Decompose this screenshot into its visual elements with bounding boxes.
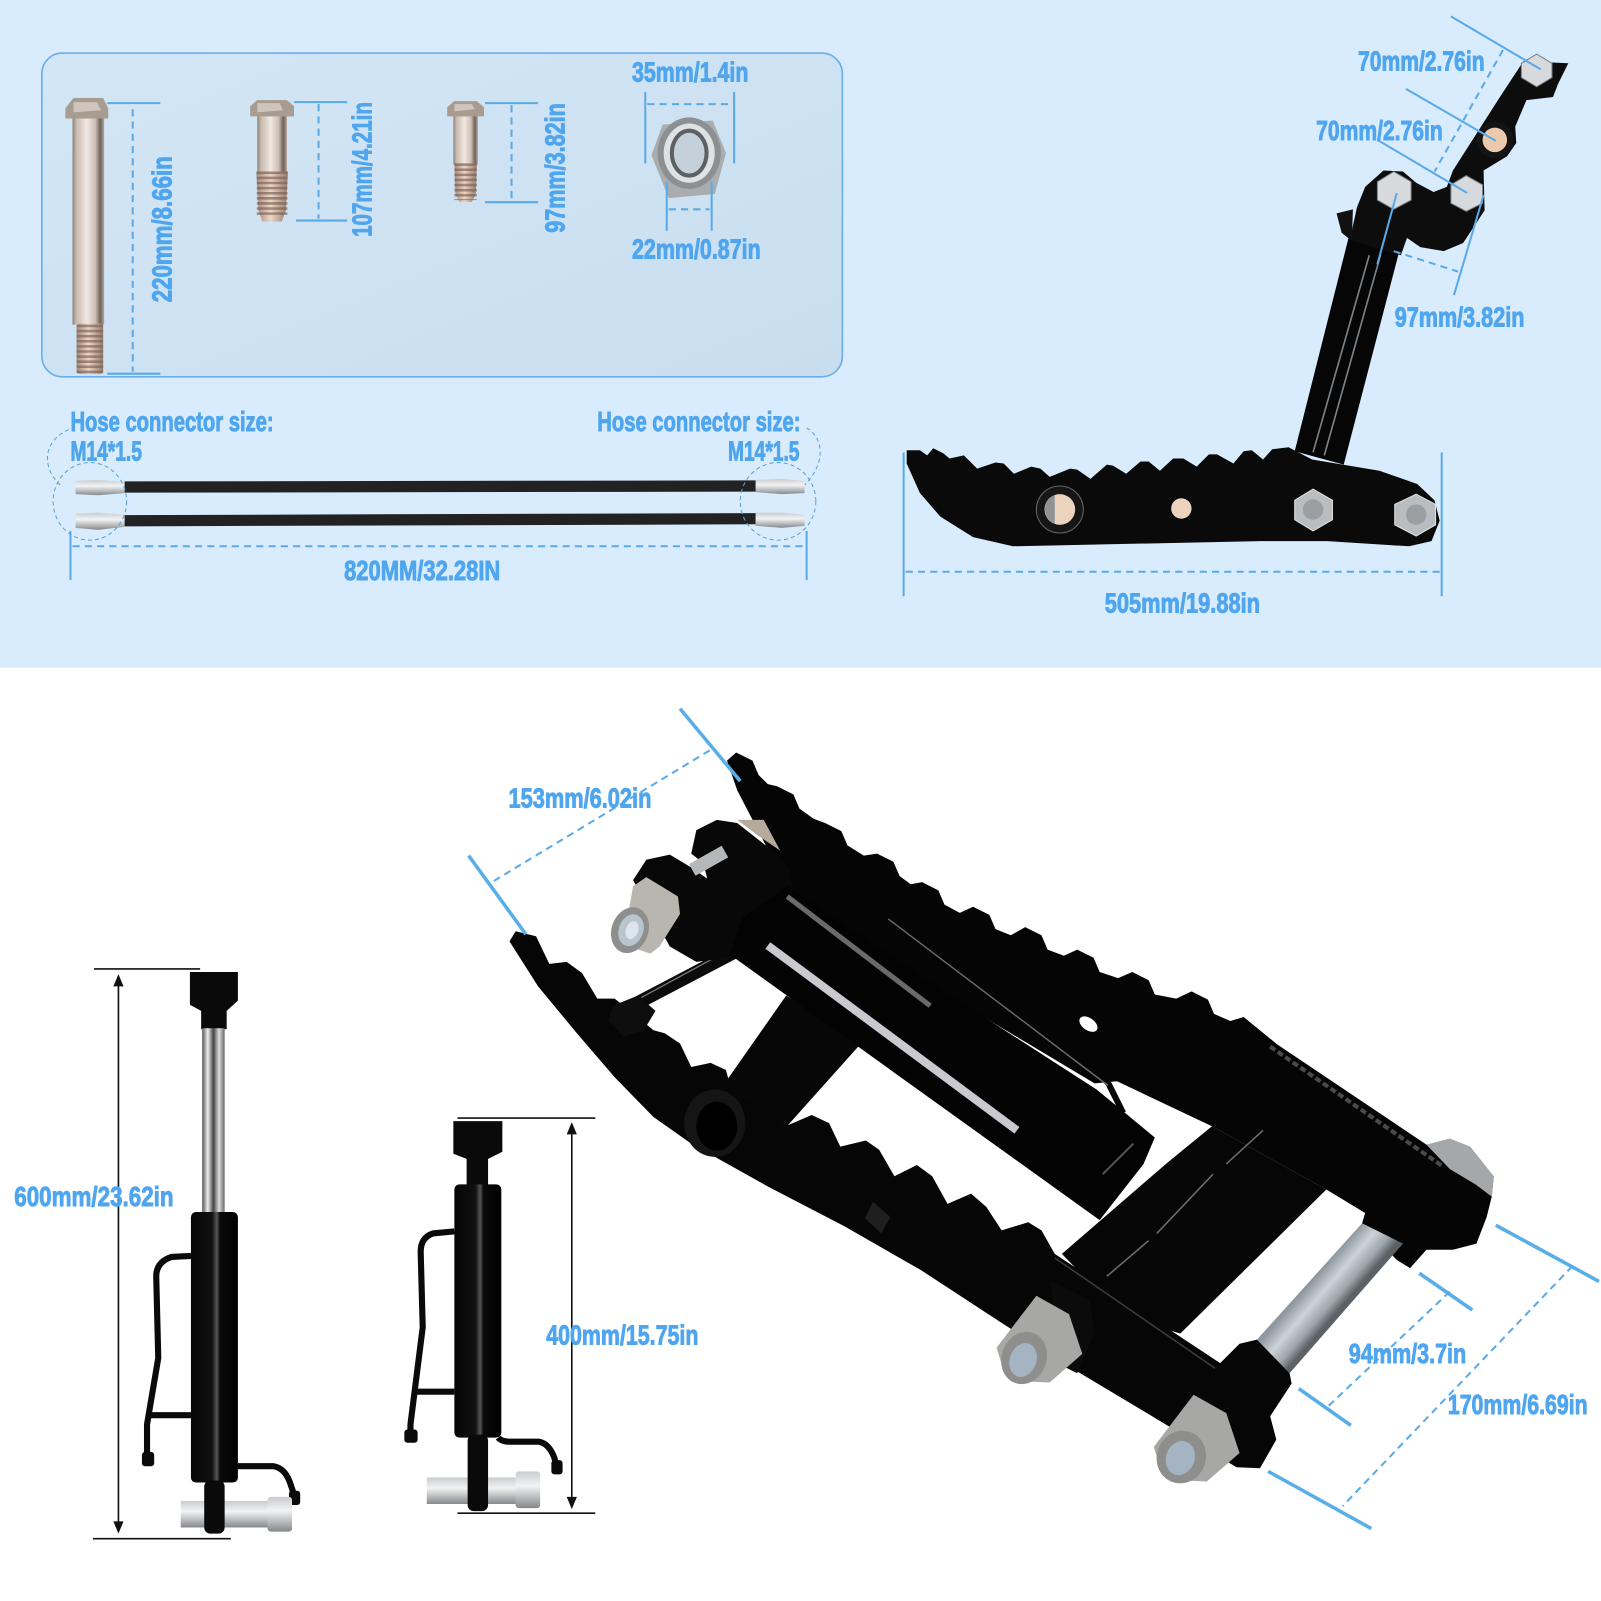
dimension: 70mm upper xyxy=(1358,16,1541,172)
back plate and rear rail xyxy=(727,753,1494,1268)
arm tube xyxy=(1295,233,1401,465)
plate hole, slot and nuts xyxy=(1036,486,1436,536)
lower lug xyxy=(468,1435,488,1511)
dimension: 107mm bolt: 107mm/4.21in xyxy=(347,102,378,237)
pin and nut xyxy=(427,1471,540,1508)
dimension: nut bore 22mm: 22mm/0.87in xyxy=(632,233,761,264)
upper bracket xyxy=(1350,61,1568,255)
pipes xyxy=(410,1231,557,1470)
main pin xyxy=(1257,1223,1403,1373)
dimension: 70mm lower: 70mm/2.76in xyxy=(1316,115,1443,146)
hub on front plate xyxy=(684,1089,745,1157)
dimension: 505mm: 505mm/19.88in xyxy=(1105,588,1260,619)
pipe end fittings xyxy=(142,1452,300,1505)
panel: main thumb assembly xyxy=(469,709,1599,1529)
hole in bracket xyxy=(1476,122,1513,158)
background: blue top section xyxy=(0,0,1601,668)
nut upper pin xyxy=(605,877,680,959)
crossbar: rear frame xyxy=(1062,1126,1326,1333)
pin and nut xyxy=(181,1497,292,1532)
rod neck xyxy=(467,1158,488,1186)
dimension: 97mm: 97mm/3.82in xyxy=(1395,302,1524,333)
dimension: nut width 35mm xyxy=(632,57,748,163)
dimension: 97mm bolt xyxy=(485,103,571,233)
label: left hose connector size: Hose connector size: xyxy=(70,406,274,437)
front ear block xyxy=(1051,1280,1095,1373)
dimension: nut bore 22mm xyxy=(632,182,761,264)
dimension: 97mm xyxy=(1377,193,1524,333)
pipes xyxy=(147,1256,296,1501)
chrome rod xyxy=(202,1028,225,1212)
label: left hose connector size: M14*1.5 xyxy=(70,435,142,466)
dimension: 153mm: 153mm/6.02in xyxy=(508,783,651,814)
dimension: 600mm: 600mm/23.62in xyxy=(14,1181,174,1212)
nut rear top xyxy=(1426,1138,1494,1197)
pipe end fittings xyxy=(404,1429,563,1474)
ear bridge xyxy=(705,868,796,950)
icon: lock nut xyxy=(651,117,726,198)
label: left hose connector size xyxy=(70,406,274,466)
dimension: 220mm bolt: 220mm/8.66in xyxy=(147,156,178,302)
slot on front plate xyxy=(865,1202,890,1233)
icon: short bolt 97mm xyxy=(447,101,484,202)
cylinder tube xyxy=(730,886,1155,1220)
dimension: 94mm xyxy=(1299,1273,1472,1425)
panel: hoses xyxy=(47,406,820,586)
panel: thumb side view xyxy=(904,16,1568,619)
dimension: 97mm bolt: 97mm/3.82in xyxy=(540,103,571,233)
dimension: 505mm xyxy=(904,452,1442,619)
dimension: 70mm lower xyxy=(1316,89,1496,193)
rod neck xyxy=(201,1009,227,1029)
dimension: nut width 35mm: 35mm/1.4in xyxy=(632,57,748,88)
icon: medium bolt 107mm xyxy=(250,100,294,222)
dimension: hose length 820mm xyxy=(70,531,807,586)
lower lug xyxy=(204,1481,225,1534)
rail sheen xyxy=(1055,1258,1215,1368)
dimension: hose length 820mm: 820MM/32.28IN xyxy=(344,555,500,586)
washer behind upper ear xyxy=(737,820,780,851)
head clevis xyxy=(453,1121,502,1159)
label: right hose connector size xyxy=(597,406,800,466)
hose pair xyxy=(76,479,805,530)
body tube xyxy=(454,1184,501,1438)
slot in back plate xyxy=(1077,1013,1100,1035)
dimension: 220mm bolt xyxy=(107,103,178,374)
lower ear xyxy=(633,855,743,962)
dimension: 400mm xyxy=(457,1118,698,1513)
bolts on bracket xyxy=(1377,54,1552,211)
crossbar: wide xyxy=(715,996,863,1128)
rear rail texture xyxy=(1270,1047,1444,1167)
dimension: 400mm: 400mm/15.75in xyxy=(546,1320,698,1351)
icon: long bolt 220mm xyxy=(65,98,108,374)
dimension: 170mm xyxy=(1268,1225,1599,1529)
dimension: 153mm xyxy=(469,709,740,934)
body tube xyxy=(191,1212,238,1483)
fitting on bracket xyxy=(1337,209,1353,241)
dimension: 107mm bolt xyxy=(294,102,378,237)
panel: bolts and nut xyxy=(42,53,842,377)
panel: cylinder extended xyxy=(14,969,300,1539)
label: right hose connector size: Hose connector size: xyxy=(597,406,800,437)
dimension: 94mm: 94mm/3.7in xyxy=(1349,1338,1466,1369)
nut front left xyxy=(994,1296,1082,1391)
hydraulic pipe xyxy=(847,909,1123,1113)
head clevis xyxy=(190,972,238,1011)
label: right hose connector size: M14*1.5 xyxy=(728,435,799,466)
connector callout circles xyxy=(47,428,820,540)
panel: cylinder retracted xyxy=(404,1118,698,1513)
thumb plate with teeth xyxy=(907,447,1440,546)
dimension: 600mm xyxy=(14,969,231,1539)
strut weld knob xyxy=(609,996,656,1036)
crossbar: thin strut xyxy=(634,945,741,1005)
front plate with teeth xyxy=(510,931,1292,1468)
upper ear xyxy=(691,820,790,896)
nut front right xyxy=(1149,1395,1240,1490)
dimension: 70mm upper: 70mm/2.76in xyxy=(1358,45,1485,76)
pivot pin xyxy=(692,852,725,870)
